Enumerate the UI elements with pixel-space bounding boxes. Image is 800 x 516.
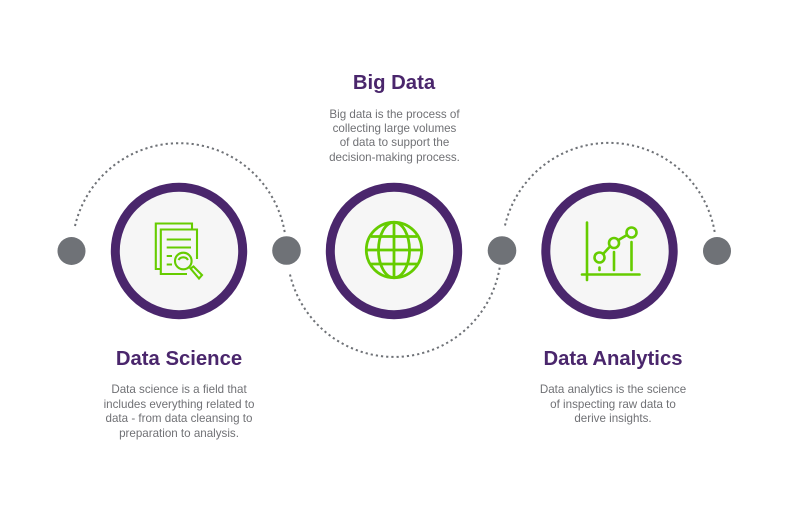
heading: Big Data: Big Data: [353, 72, 435, 94]
text: Data Science description: data - from data cleansing to: [106, 412, 252, 425]
dotted arc: under Big Data: [290, 266, 500, 357]
text: Big Data description: collecting large volumes: [333, 122, 456, 135]
icon: documents with magnifier: [156, 224, 202, 278]
heading: Data Science: Data Science: [116, 348, 242, 370]
text: Big Data description: of data to support the: [340, 136, 449, 149]
icon: line and bar chart: [582, 222, 640, 280]
text: Big Data description: decision-making process.: [329, 151, 460, 164]
text: Data Science description: [104, 383, 254, 440]
text: Data Analytics description: derive insights.: [574, 412, 652, 425]
text: Data Analytics description: [540, 383, 686, 425]
ring: Big Data: [330, 187, 458, 315]
icon: globe: [366, 222, 422, 278]
text: Data Analytics description: Data analytics is the science: [540, 383, 686, 396]
text: Big Data description: Big data is the process of: [329, 108, 460, 121]
ring: Data Analytics: [546, 187, 673, 315]
text: Data Analytics description: of inspecting raw data to: [550, 398, 676, 410]
dotted arc: over Data Analytics: [505, 143, 715, 234]
heading: Data Analytics: Data Analytics: [543, 348, 683, 370]
text: Data Science description: includes everything related to: [104, 398, 254, 410]
node dots: [58, 236, 731, 265]
text: Big Data description: [329, 108, 460, 164]
text: Data Science description: preparation to analysis.: [119, 426, 239, 440]
text: Data Science description: Data science is a field that: [111, 383, 247, 396]
ring: Data Science: [115, 187, 243, 315]
dotted arc: over Data Science: [75, 143, 285, 234]
